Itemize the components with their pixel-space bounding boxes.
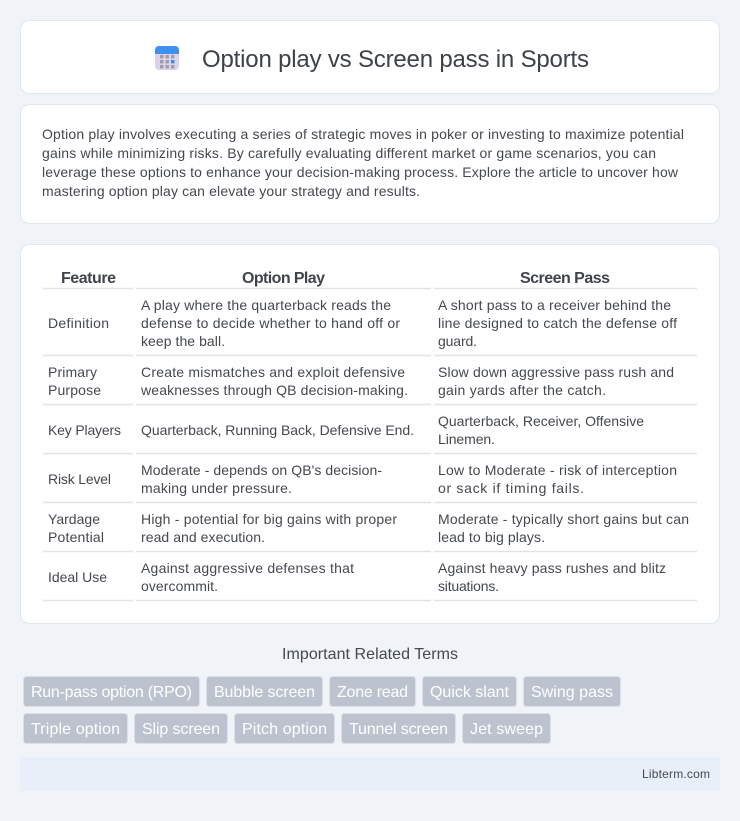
- row: yardage potential: Moderate - typically short gains but can: [438, 511, 689, 527]
- row: risk level: Low to Moderate - risk of interception: [438, 462, 677, 478]
- related term chips: Tunnel screen: [349, 721, 448, 738]
- row: yardage potential: [48, 511, 689, 545]
- row: risk level: Risk Level: [48, 471, 111, 487]
- table header: Option Play: [242, 270, 325, 287]
- row: primary purpose: Primary: [48, 364, 97, 380]
- related term chips: Quick slant: [430, 684, 510, 701]
- related term chips: Pitch option: [242, 721, 327, 738]
- row: ideal use: overcommit.: [141, 578, 218, 594]
- heading: related terms: Important Related Terms: [282, 646, 458, 663]
- icon: calendar: [155, 46, 179, 70]
- row: risk level: [48, 462, 677, 496]
- row: definition: A short pass to a receiver behind the: [438, 297, 671, 313]
- related term chips: Slip screen: [142, 721, 220, 738]
- footer: [20, 757, 720, 791]
- row: risk level: making under pressure.: [141, 480, 292, 496]
- row: key players: Quarterback, Running Back, Defensive End.: [141, 422, 414, 438]
- row: definition: Definition: [48, 315, 109, 331]
- row: yardage potential: lead to big plays.: [438, 529, 545, 545]
- related term chips: [24, 676, 620, 744]
- row: key players: Key Players: [48, 422, 121, 438]
- related term chips: Swing pass: [531, 684, 613, 701]
- row: ideal use: Against aggressive defenses that: [141, 560, 354, 576]
- panel: intro text: leverage these options to enhance your decision-making process. Explore the article to uncover how: [42, 164, 679, 180]
- table header: Screen Pass: [520, 270, 610, 287]
- related term chips: Bubble screen: [214, 684, 315, 701]
- row: primary purpose: Slow down aggressive pass rush and: [438, 364, 674, 380]
- row: primary purpose: gain yards after the catch.: [438, 382, 606, 398]
- footer: Libterm.com: [642, 767, 710, 781]
- row: ideal use: Against heavy pass rushes and blitz: [438, 560, 666, 576]
- panel: header: [20, 20, 720, 94]
- row: ideal use: [48, 560, 666, 594]
- row: primary purpose: weaknesses through QB decision-making.: [140, 382, 408, 398]
- row: definition: A play where the quarterback reads the: [141, 297, 391, 313]
- row: definition: [48, 297, 677, 349]
- row: ideal use: Ideal Use: [48, 569, 107, 585]
- row: primary purpose: [48, 364, 674, 398]
- row: primary purpose: Create mismatches and exploit defensive: [141, 364, 405, 380]
- related term chips: Run-pass option (RPO): [31, 684, 192, 701]
- table header: Feature: [61, 270, 116, 287]
- row: definition: guard.: [438, 333, 477, 349]
- row: risk level: Moderate - depends on QB's decision-: [141, 462, 382, 478]
- row: ideal use: situations.: [438, 578, 499, 594]
- row: key players: Linemen.: [438, 431, 495, 447]
- row: yardage potential: read and execution.: [141, 529, 265, 545]
- row: primary purpose: Purpose: [48, 382, 101, 398]
- row: yardage potential: High - potential for big gains with proper: [141, 511, 397, 527]
- row: yardage potential: Potential: [48, 529, 104, 545]
- panel: intro text: gains while minimizing risks. By carefully evaluating different market or game scenarios, you can: [42, 145, 656, 161]
- panel: comparison table: [20, 244, 720, 624]
- panel: intro text: [20, 104, 720, 224]
- related term chips: Triple option: [31, 721, 120, 738]
- related term chips: Jet sweep: [470, 721, 543, 738]
- row: yardage potential: Yardage: [48, 511, 100, 527]
- row: key players: Quarterback, Receiver, Offensive: [438, 413, 644, 429]
- related term chips: Zone read: [337, 684, 408, 701]
- panel: intro text: Option play involves executing a series of strategic moves in poker or investing to maximize potential: [42, 126, 684, 142]
- row: risk level: or sack if timing fails.: [438, 480, 584, 496]
- row: definition: line designed to catch the defense off: [438, 315, 677, 331]
- title: Option play vs Screen pass in Sports: [202, 46, 589, 73]
- row: key players: [48, 413, 644, 447]
- row: definition: keep the ball.: [141, 333, 225, 349]
- table header: [61, 270, 610, 287]
- row: definition: defense to decide whether to hand off or: [141, 315, 400, 331]
- panel: intro text: mastering option play can elevate your strategy and results.: [42, 183, 420, 199]
